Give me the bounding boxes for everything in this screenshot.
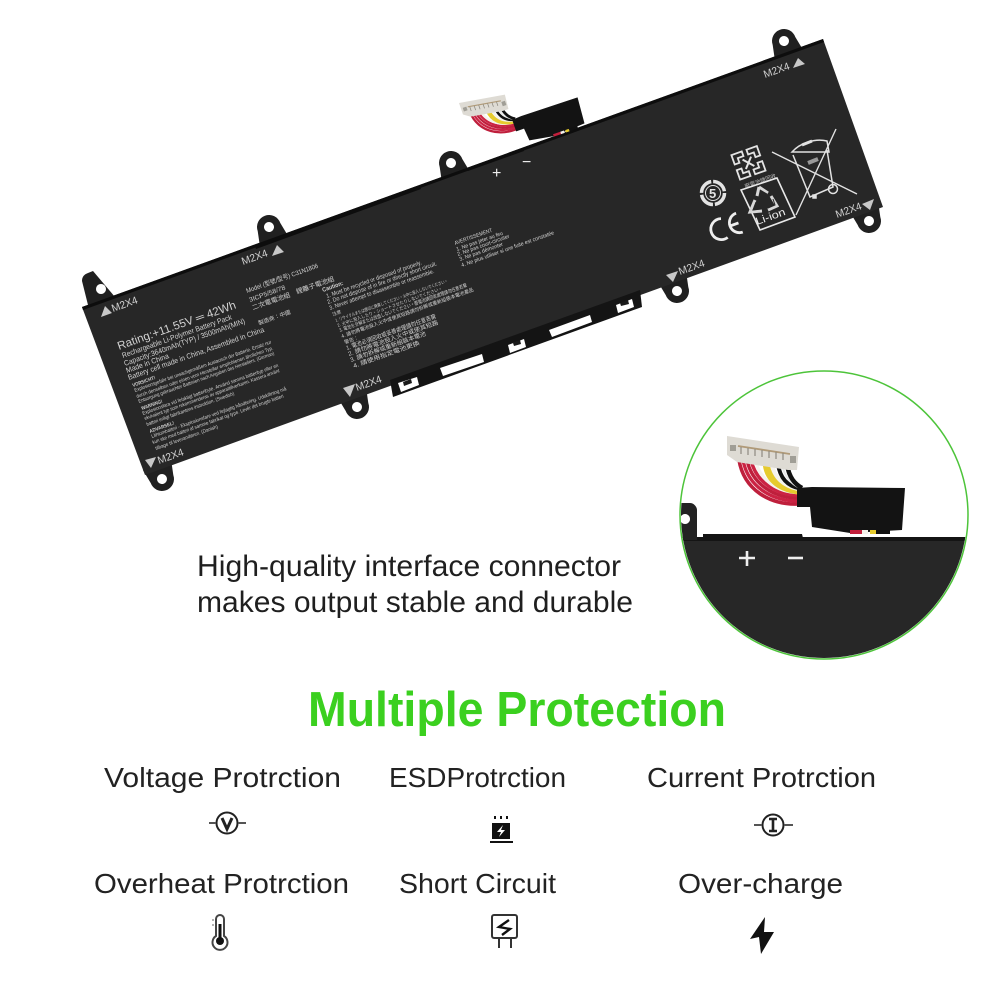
- M2X4 screw labels: M2X4: [354, 373, 384, 394]
- rating label text: ADVARSEL!: [149, 420, 175, 435]
- icon: voltage: [209, 812, 246, 834]
- top edge highlight: [82, 39, 824, 310]
- rating label text: durch denselben oder einen vom Hersteller empfohlenen ähnlichen Typ.: [136, 346, 274, 400]
- heading: Multiple Protection: [308, 683, 726, 737]
- M2X4 screw labels: M2X4: [156, 446, 186, 467]
- icon: taiwan recycling mark: [731, 143, 778, 191]
- M2X4 screw labels: [101, 58, 874, 468]
- rating label text: batteri enligt fabrikantens instruktion. (Swedish): [146, 391, 236, 428]
- polarity marks: +: [492, 165, 501, 182]
- rating label text: [116, 300, 288, 452]
- caution text: 3. Never attempt to disassemble or reassemble.: [329, 269, 436, 312]
- zoomed polarity marks: [739, 551, 803, 566]
- rating label text: Capacity:3640mAh(TYP) / 3500mAh(MIN): [123, 316, 247, 368]
- icon: 5 year mark: [702, 182, 724, 204]
- icon: current: [754, 814, 793, 836]
- M2X4 screw labels: M2X4: [240, 247, 270, 268]
- battery body: [82, 39, 883, 475]
- caution text: [322, 260, 475, 370]
- French warning text: 2. Ne pas court-circuiter: [457, 234, 511, 258]
- mounting tabs: [82, 25, 887, 495]
- connector cable: [459, 66, 587, 162]
- caption: makes output stable and durable: [197, 586, 633, 619]
- icon: crossed-out bin: [772, 129, 857, 215]
- caution text: 1. リサイクルまたは適切に廃棄してください。火中に投入しないでください。: [334, 277, 449, 324]
- M2X4 screw labels: M2X4: [677, 257, 707, 278]
- icon: ESD: [490, 816, 513, 843]
- French warning text: AVERTISSEMENT: [454, 228, 494, 247]
- French warning text: 3. Ne pas démonter: [459, 242, 504, 263]
- protection labels: [94, 762, 876, 899]
- circle outline: [680, 371, 968, 659]
- rating label text: Entsorgung gebrauchter Batterien nach Angaben des Herstellers. (German): [138, 351, 276, 405]
- polarity marks: −: [522, 154, 531, 171]
- rating label text: Made in China: [125, 351, 171, 375]
- icon: Li-ion recycling box: Li-ion: [754, 206, 787, 228]
- protection labels: Short Circuit: [399, 868, 556, 899]
- model text: 製造商：中國: [257, 308, 292, 327]
- protection labels: Current Protrction: [647, 762, 876, 793]
- icon: thermometer: [212, 915, 228, 950]
- zoomed connector and cable: [727, 436, 905, 533]
- M2X4 screw labels: M2X4: [110, 294, 140, 315]
- caution text: 4. 請勿將電池投入火中或使其短路請勿拆解或重新組裝本電池產品: [340, 286, 475, 340]
- caution text: 1. 電池必須回收或妥善處理請勿任意丟棄: [345, 312, 437, 352]
- polarity marks: [492, 154, 531, 182]
- M2X4 screw labels: M2X4: [762, 60, 792, 81]
- zoomed battery body: [682, 538, 966, 658]
- rating label text: Battery cell made in China, Assembled in China: [127, 325, 266, 382]
- rating label text: WARNING!: [141, 399, 164, 412]
- icon: taiwan recycling mark: 廢電池請回收: [743, 171, 778, 190]
- rating label text: kun ske med batteri af samme fabrikat og type. Levér det brugte batteri: [152, 394, 285, 446]
- rating label text: Rating:+11.55V ═ 42Wh: [116, 300, 238, 353]
- rating label text: ekvivalent typ som rekommenderas av apparattillverkaren. Kassera använt: [144, 368, 281, 422]
- caption: [197, 550, 633, 619]
- model text: 鋰離子電池組: [295, 274, 336, 296]
- caption: High-quality interface connector: [197, 550, 621, 583]
- caution text: 2. Do not dispose of in fire or directly short circuit.: [327, 261, 438, 306]
- French warning text: 4. Ne plus utiliser si une fuite est constatée: [461, 230, 555, 269]
- icon: short circuit: [492, 915, 517, 948]
- rating label text: Explosionsfara vid felaktigt batteribyte. Använd samma batterityp eller en: [142, 363, 280, 417]
- caution text: 3. 電池を分解または改造しないでください。廢電池請回收處理請勿任意丟棄: [338, 282, 468, 334]
- icon: lightning bolt: [750, 917, 774, 954]
- caution text: 注意: [331, 308, 343, 318]
- rating label text: Lithiumbatteri - Eksplosionsfare ved fejlagtig håndtering. Udskiftning må: [150, 385, 288, 440]
- protection labels: Voltage Protrction: [104, 762, 341, 793]
- icon: CE mark: [708, 213, 743, 243]
- protection labels: Overheat Protrction: [94, 868, 349, 899]
- caution text: 2. 請勿將電池投入火中或使其短路: [347, 318, 439, 358]
- model text: 二次電電池組: [251, 290, 292, 312]
- caution text: 4. 請使用指定電池更換: [352, 339, 421, 370]
- caution text: 1. Must be recycled or disposed of properly.: [326, 260, 423, 300]
- rating label text: tilbage til leverandøren. (Danish): [155, 424, 219, 452]
- model text: [245, 261, 336, 327]
- zoomed top edge: [680, 534, 970, 541]
- zoomed mounting tab: [680, 503, 697, 540]
- model text: 3ICP5/58/78: [248, 284, 287, 304]
- model text: Model (型號/型号) C31N1806: [245, 261, 320, 295]
- lower frame strip with slots: [390, 290, 642, 397]
- caution text: 2. 火中に投入したり、ショートさせたりしないでください。: [336, 285, 443, 329]
- caution text: 3. 請勿拆解或重新組裝本電池: [349, 330, 427, 364]
- caution text: Caution:: [322, 281, 344, 294]
- protection labels: ESDProtrction: [389, 762, 566, 793]
- caution text: 警告：: [343, 334, 360, 346]
- rating label text: VORSICHT!: [132, 375, 157, 389]
- protection labels: Over-charge: [678, 868, 843, 899]
- icon: Li-ion recycling box: [741, 178, 795, 230]
- French warning text: 1. Ne pas jeter au feu: [456, 231, 504, 253]
- rating label text: Rechargeable Li-Polymer Battery Pack: [121, 312, 233, 360]
- icon: 5 year mark: 5: [709, 186, 716, 201]
- M2X4 screw labels: M2X4: [834, 200, 864, 221]
- detail circle: connector close-up: [670, 371, 980, 668]
- rating label text: Explosionsgefahr bei unsachgemäßem Austausch der Batterie. Ersatz nur: [134, 339, 273, 394]
- battery product photo: [82, 25, 887, 495]
